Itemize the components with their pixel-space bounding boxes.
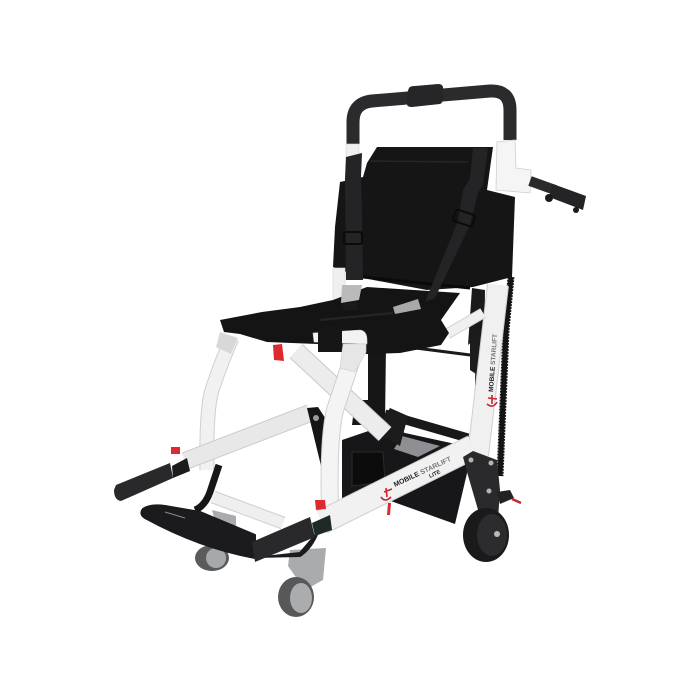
seat <box>220 287 460 354</box>
right harness strap <box>320 148 488 320</box>
logo sub text on side bar: LITE <box>428 469 442 480</box>
battery box <box>342 408 472 524</box>
left grip <box>114 458 190 501</box>
front caster <box>278 548 326 617</box>
rear metal plate <box>463 451 500 538</box>
back caster <box>195 510 236 571</box>
logo text on side bar: MOBILE STARLIFT <box>393 456 453 489</box>
backrest cushion <box>333 147 515 290</box>
top push handle <box>353 84 510 144</box>
red logo mark on side bar <box>381 488 392 500</box>
main side bar with logo <box>322 447 473 522</box>
side handle <box>530 181 586 213</box>
footrest right grip <box>252 515 332 562</box>
front frame <box>185 332 385 523</box>
left harness strap <box>341 153 363 310</box>
red knobs <box>171 344 391 515</box>
text on rear post: MOBILE STARLIFT <box>488 334 499 392</box>
rear wheel <box>463 508 509 562</box>
footrest loop <box>141 465 318 558</box>
back tracks and chains <box>352 277 511 476</box>
white frame uprights <box>333 140 531 455</box>
rear latch <box>497 490 521 504</box>
